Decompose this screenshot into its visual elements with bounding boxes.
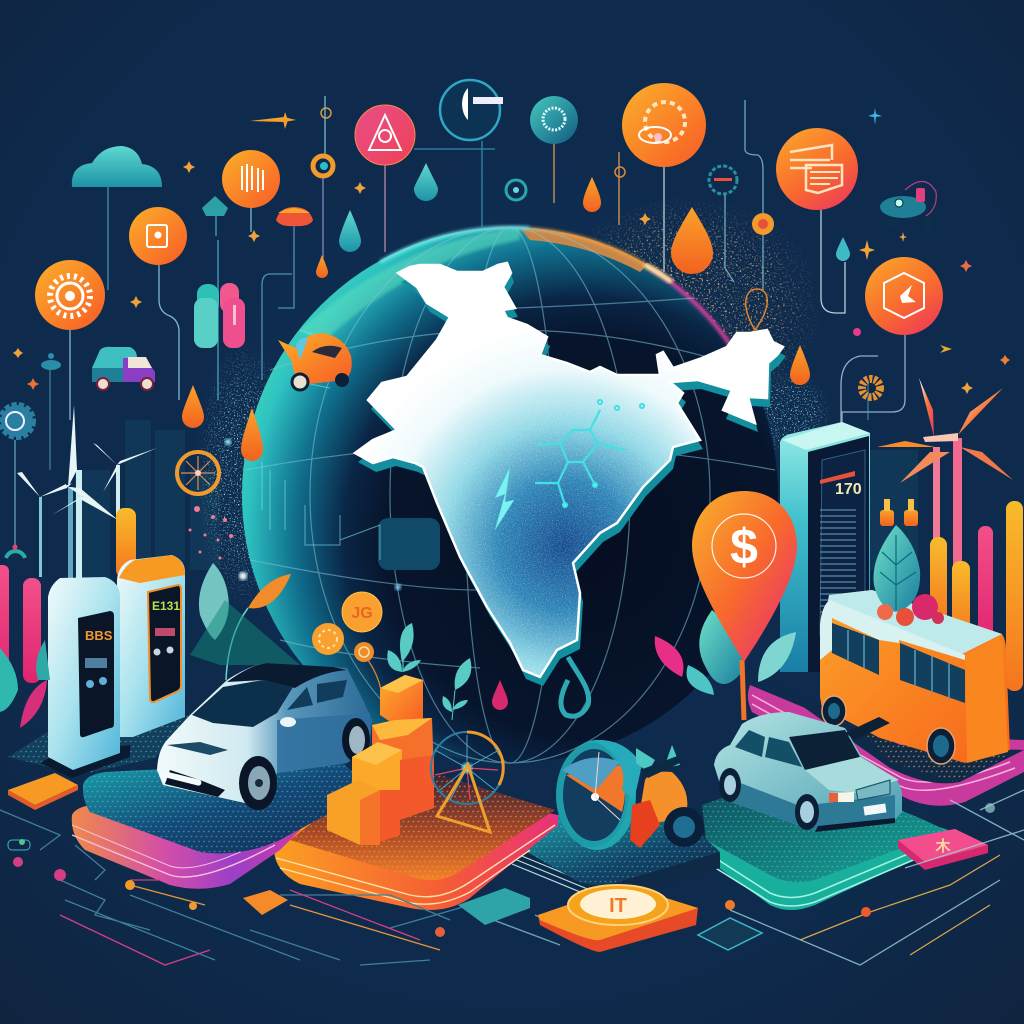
left wind turbines (17, 405, 157, 585)
location pin with dollar (692, 491, 797, 662)
bus roof leaf (873, 525, 920, 612)
globe (188, 227, 778, 763)
icon: cloud (72, 146, 162, 290)
teal small tiles (458, 888, 762, 950)
hanging drop outline under India (561, 657, 589, 716)
coins (312, 592, 382, 690)
orange small tiles (8, 773, 288, 915)
pink tile: 木 (934, 837, 951, 855)
spoked wheel with triangle (431, 732, 503, 832)
glowing nodes (188, 439, 401, 590)
background leaves (0, 563, 300, 728)
speckle around globe (190, 190, 840, 620)
front charger display: BBS (85, 628, 113, 643)
faint city skyline (75, 420, 918, 590)
icon: spoked wheel (177, 452, 219, 494)
green platform (702, 770, 948, 910)
bus (820, 525, 1010, 764)
icon: square badge (129, 207, 187, 400)
icon: orange sunflower (862, 379, 880, 397)
leaves around pin (655, 610, 796, 720)
orange coin tile: IT (609, 895, 627, 917)
orange cube platform (274, 775, 558, 910)
icon: delivery truck (92, 347, 155, 390)
icon: small orange car (278, 333, 352, 390)
plug icons (880, 499, 918, 526)
circuit lines (0, 790, 1024, 965)
icon: teal badge (530, 96, 578, 203)
sedan car (714, 712, 902, 832)
icon: large gear badge (622, 83, 706, 272)
pink tile (898, 829, 988, 870)
big charging tower (780, 422, 870, 672)
scooter with large wheel (556, 740, 704, 850)
molecule network (495, 400, 644, 530)
map of India (355, 263, 786, 690)
icon: pink triangle badge (355, 105, 415, 252)
electric hatchback car (157, 663, 372, 810)
sparkles (13, 108, 1010, 394)
rear charger display: E131 (152, 599, 180, 613)
sprouts (387, 623, 508, 720)
node lines (45, 365, 868, 470)
right bars (930, 501, 1023, 691)
signal ring left (41, 353, 61, 370)
charger base platform (8, 715, 200, 775)
right wind turbines (877, 378, 1013, 568)
pink platform under bus (748, 680, 1024, 806)
circuit nodes (8, 803, 995, 937)
left bars (0, 508, 136, 685)
charger rear (117, 555, 185, 737)
icon: droplets (182, 163, 850, 461)
small ring nodes (313, 96, 774, 330)
stacked orange cubes (327, 675, 434, 845)
orange coin tile (538, 885, 698, 952)
icon: mushroom markers (202, 196, 313, 400)
blue purple car platform (72, 760, 372, 889)
icon: dark minus badge (414, 80, 503, 228)
icon: left sun badge (35, 260, 105, 420)
icon: document badge (776, 128, 858, 313)
icon: hover robot (880, 181, 936, 229)
icon: bars badge (222, 150, 280, 232)
charger front (40, 577, 130, 778)
icon: teal gear (1, 405, 33, 558)
coins: JG (351, 605, 373, 622)
icon: battery pills (194, 283, 245, 348)
icon: red square badge (841, 257, 943, 425)
tower display: 170 (835, 481, 862, 498)
teal platform under scooter (510, 815, 720, 900)
location pin with dollar: $ (730, 519, 758, 575)
